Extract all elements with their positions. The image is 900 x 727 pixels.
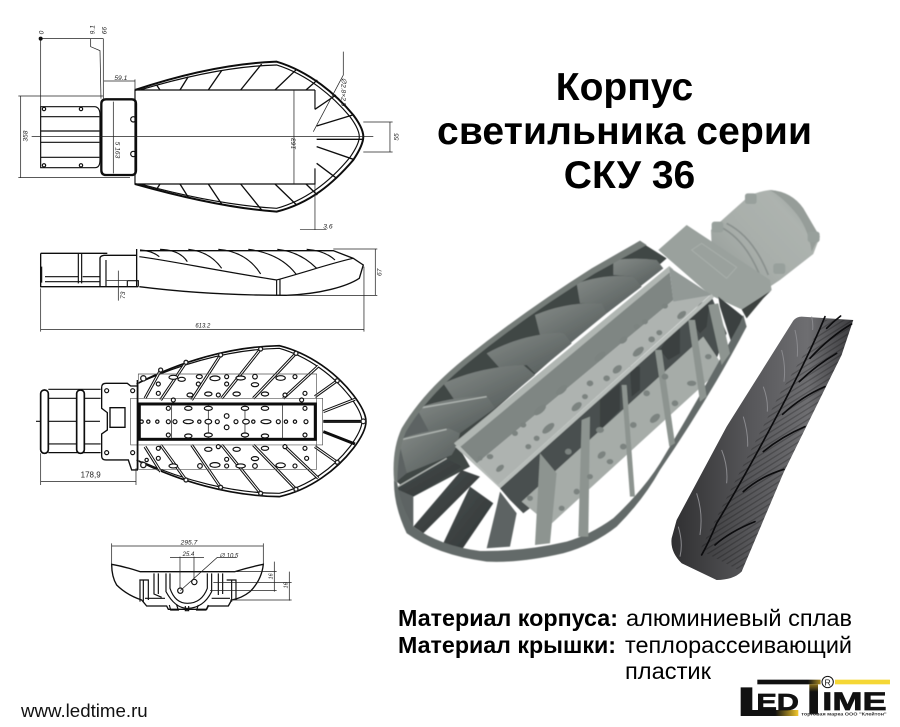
- top view labels: 9.1: [89, 25, 96, 34]
- left wedge panels: [395, 408, 447, 527]
- underside view outline: [137, 346, 366, 497]
- cylinder end flange: [770, 190, 819, 252]
- interior behind upper fins: [394, 242, 667, 497]
- top view labels: 59.1: [114, 75, 128, 82]
- title: светильника серии: [437, 110, 812, 153]
- top view labels: 3.6: [323, 224, 333, 231]
- materials text: алюминиевый сплав: [626, 605, 852, 631]
- logo letters IME: IME: [822, 689, 887, 716]
- top view labels: ∅2.8×2.5: [339, 77, 346, 107]
- title: Корпус: [556, 66, 693, 109]
- section view interior: [139, 573, 236, 611]
- tray long wall: [457, 268, 673, 465]
- underside mounting cylinder: [36, 389, 101, 453]
- section view outline: [112, 564, 263, 609]
- title: [437, 66, 812, 197]
- underside ribs: [145, 349, 363, 493]
- materials text: [398, 605, 852, 684]
- section view labels: 16: [283, 582, 289, 588]
- dimension 178,9: [41, 453, 136, 485]
- top view labels: 5 163: [113, 142, 120, 159]
- dark pillars behind rim: [600, 297, 743, 430]
- logo letters ED: ED: [756, 689, 799, 715]
- top view junction box: [101, 99, 136, 175]
- top view ribs: [157, 64, 363, 210]
- logo registered mark: R: [825, 677, 831, 687]
- side view labels: 73: [120, 291, 127, 299]
- fan panel light edges: [395, 397, 487, 488]
- drawing: top view with dimensions: [18, 25, 400, 231]
- top view housing outline: [135, 62, 363, 212]
- junction box: [658, 225, 772, 309]
- cover faint ribs: [678, 317, 813, 557]
- website url: www.ledtime.ru: [20, 700, 148, 721]
- outer shell upper band: [394, 241, 647, 483]
- top view inner shell line: [135, 65, 359, 208]
- dark fan panels lower left: [395, 458, 493, 550]
- side view ribs: [42, 249, 353, 295]
- top view labels: [22, 25, 400, 231]
- side view labels: 613.2: [195, 324, 211, 330]
- title: СКУ 36: [564, 154, 695, 197]
- materials text: теплорассеивающий: [625, 632, 852, 658]
- logo T stem: [809, 684, 818, 714]
- side view labels: 67: [376, 268, 383, 276]
- drawing: side view with dimensions: [41, 249, 383, 332]
- section view labels: ∅ 10.5: [219, 552, 239, 559]
- dark strip below tray: [500, 297, 727, 513]
- underside plate frame: [131, 374, 323, 469]
- section view dimensions: [112, 543, 292, 601]
- side view dimension lines: [41, 249, 377, 332]
- drawing: front section view: [112, 540, 292, 611]
- tray floor: [475, 295, 710, 485]
- cylinder lugs: [712, 193, 820, 274]
- drawing: underside view: [36, 346, 366, 497]
- grey fan panel: [487, 492, 517, 548]
- section view labels: [180, 540, 289, 588]
- dark underside of junction box: [742, 290, 772, 318]
- lower ribs: [535, 303, 730, 545]
- photo: luminaire housing: [394, 190, 820, 562]
- materials text: Материал крышки:: [398, 632, 616, 658]
- section view labels: 16: [269, 573, 275, 579]
- section view labels: 295.7: [180, 540, 198, 547]
- top view labels: 0: [38, 30, 45, 34]
- tray and plate bumps: [477, 303, 712, 511]
- top view labels: 163: [291, 138, 298, 149]
- cover stripes: [700, 320, 853, 572]
- logo black bar: [757, 680, 821, 684]
- underside rib nodes: [141, 347, 366, 495]
- mounting cylinder: [711, 190, 820, 308]
- materials text: пластик: [625, 658, 712, 684]
- side view labels: [120, 268, 383, 330]
- section view labels: 25.4: [182, 552, 195, 558]
- underside central channel: [139, 404, 315, 439]
- logo L base: [741, 687, 798, 716]
- cover grooves: [702, 316, 852, 555]
- logo registered mark: [822, 676, 833, 688]
- materials text: Материал корпуса:: [398, 605, 618, 631]
- cover body: [671, 317, 853, 580]
- logo tagline: торговая марка ООО "Клейтон": [801, 711, 887, 717]
- upper fins: [398, 259, 663, 473]
- logo: LED TIME: [741, 676, 890, 717]
- tray end wall and right rim: [669, 267, 712, 302]
- top view labels: 358: [22, 130, 29, 142]
- logo yellow bar: [835, 680, 890, 684]
- side view body outline: [41, 249, 363, 295]
- underside plate bumps: [140, 374, 309, 468]
- outer shell lower band: [394, 315, 747, 562]
- top view labels: 66: [102, 27, 109, 34]
- lower base plate: [522, 337, 723, 525]
- underside inner shell: [142, 348, 362, 493]
- top view mounting cylinder: [41, 107, 100, 168]
- photo: dark heat-dissipating cover: [671, 316, 853, 580]
- top view labels: 55: [393, 133, 400, 141]
- top view dimension lines: [18, 39, 393, 230]
- underside junction box: [102, 380, 137, 470]
- dimension 178,9: 178,9: [81, 470, 101, 479]
